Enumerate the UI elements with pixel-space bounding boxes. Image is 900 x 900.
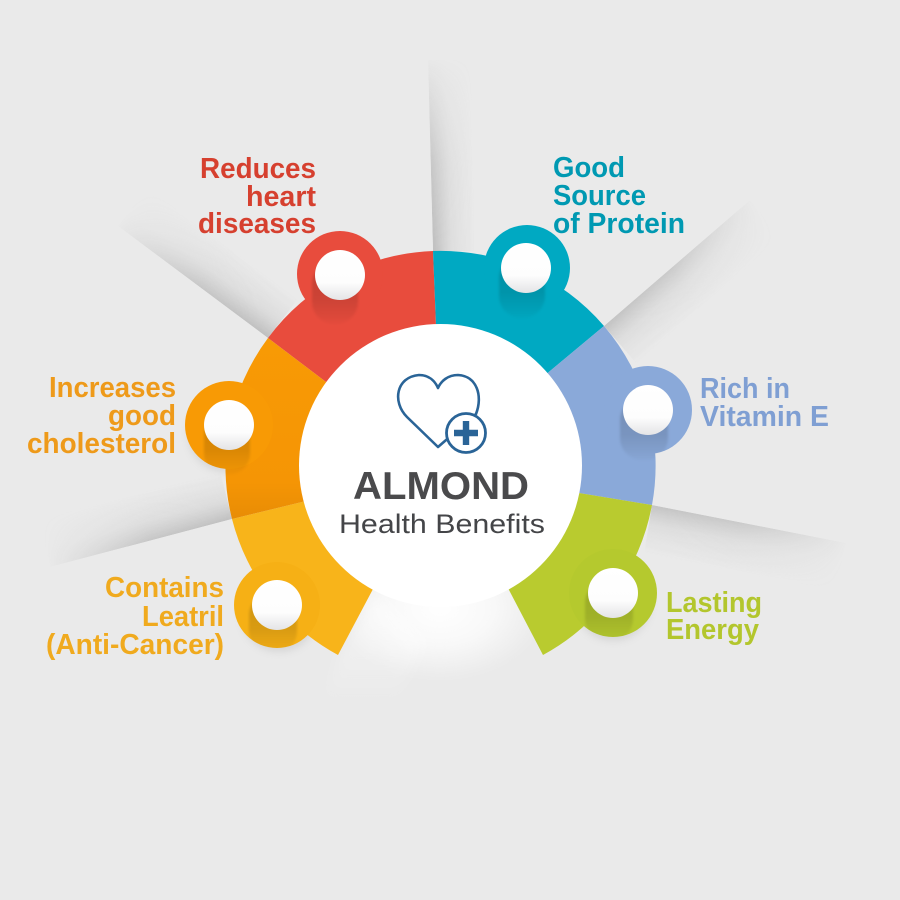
radiating paper-fold shadows — [38, 60, 846, 592]
label: good source of protein: Source — [553, 180, 646, 212]
segment: increases good cholesterol — [185, 338, 326, 519]
label: rich in vitamin E: Rich in — [700, 373, 790, 405]
knob shadows on background — [188, 396, 651, 652]
label: lasting energy: Lasting — [666, 587, 762, 619]
label: increases good cholesterol: good — [108, 400, 176, 432]
label: lasting energy — [666, 587, 762, 646]
label: good source of protein: of Protein — [553, 208, 685, 240]
label: reduces heart diseases — [198, 153, 316, 240]
label: rich in vitamin E — [700, 373, 829, 433]
label: contains leatril: Contains — [105, 572, 224, 604]
icon: heart with plus — [398, 375, 486, 452]
segment: rich in vitamin E — [548, 326, 692, 505]
label: reduces heart diseases: diseases — [198, 208, 316, 240]
label: contains leatril: (Anti-Cancer) — [46, 629, 224, 661]
subtitle: Health Benefits: Health Benefits — [339, 509, 545, 539]
label: increases good cholesterol — [27, 372, 176, 460]
white buttons — [204, 243, 673, 630]
soft white glow below the centre circle — [322, 536, 545, 702]
label: contains leatril: Leatril — [142, 601, 224, 633]
segment: good source of protein — [433, 225, 604, 373]
label: lasting energy: Energy — [666, 614, 759, 646]
label: reduces heart diseases: Reduces — [200, 153, 316, 185]
label: rich in vitamin E: Vitamin E — [700, 401, 829, 433]
label: increases good cholesterol: Increases — [49, 372, 176, 404]
label: contains leatril — [46, 572, 224, 661]
segment: contains leatril — [232, 502, 373, 655]
centre white circle — [299, 324, 582, 607]
label: reduces heart diseases: heart — [246, 181, 316, 213]
segment: lasting energy — [508, 493, 657, 655]
label: good source of protein: Good — [553, 152, 625, 184]
segment: reduces heart diseases — [268, 231, 436, 382]
label: increases good cholesterol: cholesterol — [27, 428, 176, 460]
label: good source of protein — [553, 152, 685, 240]
title: ALMOND: ALMOND — [353, 465, 529, 508]
